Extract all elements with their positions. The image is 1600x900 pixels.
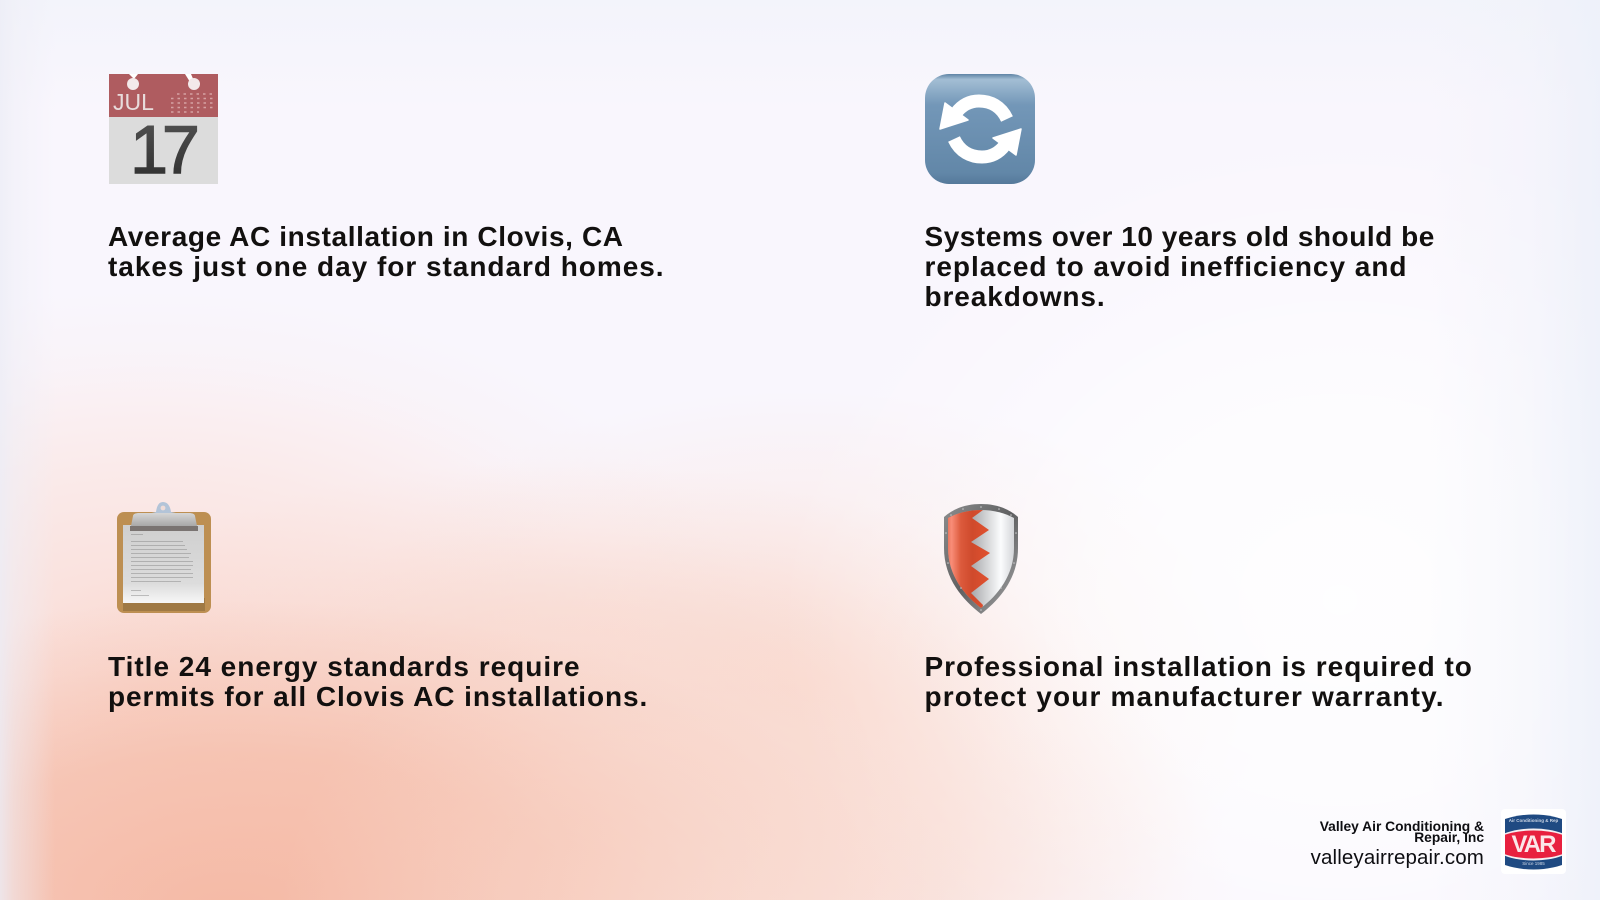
text: system age: Systems over 10 years old should be bbox=[924, 221, 1435, 252]
footer brand text: valleyairrepair.com bbox=[1311, 846, 1484, 869]
text: permits: Title 24 energy standards require bbox=[108, 651, 581, 682]
logo: Air Conditioning & Rep bbox=[1509, 818, 1558, 823]
icon: sync arrows bbox=[925, 74, 1035, 184]
logo: VAR bbox=[1512, 831, 1556, 858]
text: permits bbox=[108, 651, 648, 712]
text: warranty: Professional installation is required to bbox=[924, 651, 1473, 682]
footer brand text: Repair, Inc bbox=[1414, 830, 1484, 845]
text: system age: breakdowns. bbox=[924, 281, 1106, 312]
icon: clipboard bbox=[117, 502, 211, 613]
icon: calendar bbox=[109, 74, 218, 184]
icon: calendar: JUL bbox=[113, 89, 154, 115]
icon: shield bbox=[944, 504, 1018, 614]
text: warranty bbox=[924, 651, 1473, 712]
logo bbox=[1503, 809, 1566, 874]
logo: Since 1985 bbox=[1522, 861, 1545, 866]
footer brand text bbox=[1310, 819, 1484, 869]
text: system age: replaced to avoid inefficiency and bbox=[924, 251, 1408, 282]
text: installation time: Average AC installation in Clovis, CA bbox=[108, 221, 624, 252]
text: permits: permits for all Clovis AC installations. bbox=[108, 681, 648, 712]
text: system age bbox=[924, 221, 1435, 312]
text: installation time bbox=[108, 221, 665, 282]
text: warranty: protect your manufacturer warranty. bbox=[924, 681, 1445, 712]
text: installation time: takes just one day for standard homes. bbox=[108, 251, 665, 282]
footer brand text: Valley Air Conditioning & bbox=[1320, 819, 1484, 834]
